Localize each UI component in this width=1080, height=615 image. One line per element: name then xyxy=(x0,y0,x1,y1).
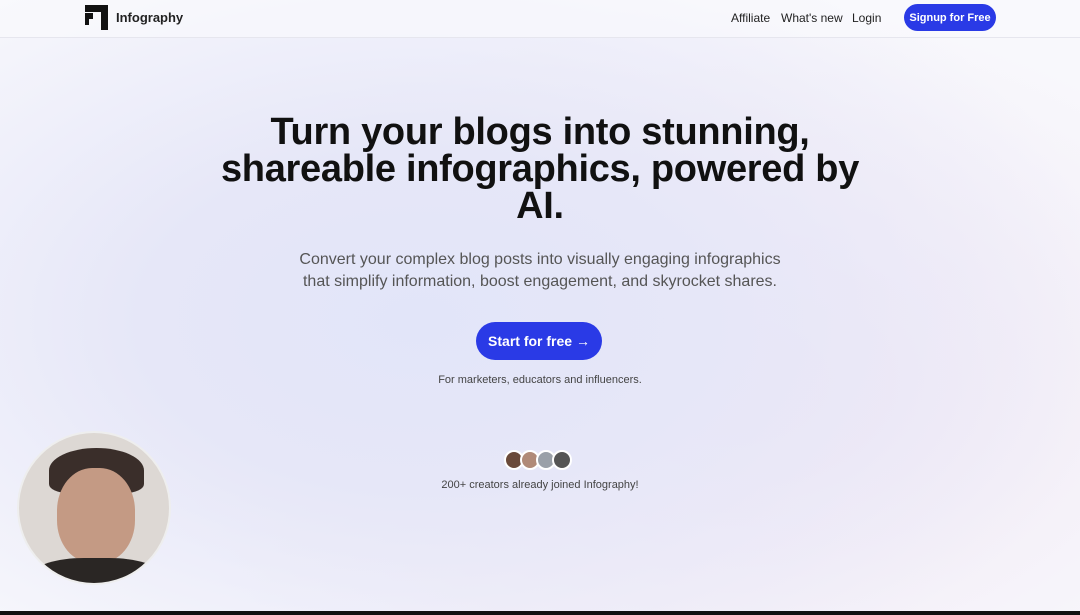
subtitle: Convert your complex blog posts into visually engaging infographics xyxy=(299,251,781,268)
social proof: 200+ creators already joined Infography! xyxy=(441,479,639,491)
logo icon xyxy=(85,5,108,30)
audience note: For marketers, educators and influencers. xyxy=(438,374,642,386)
CTA button xyxy=(476,322,602,360)
bottom bar xyxy=(0,611,1080,615)
navbar xyxy=(0,0,1080,38)
navbar: What's new xyxy=(781,11,843,25)
video bubble xyxy=(17,431,171,585)
brand: Infography xyxy=(116,10,183,25)
signup button: Signup for Free xyxy=(909,12,991,24)
subtitle: that simplify information, boost engagement, and skyrocket shares. xyxy=(303,273,777,290)
navbar: Login xyxy=(852,11,881,25)
headline xyxy=(221,111,860,227)
subtitle xyxy=(299,251,781,290)
headline: AI. xyxy=(516,185,564,227)
nav links: Affiliate xyxy=(731,11,770,25)
CTA button: Start for free → xyxy=(488,333,590,349)
headline: shareable infographics, powered by xyxy=(221,148,859,190)
signup button xyxy=(904,4,996,31)
avatars xyxy=(504,450,572,470)
headline: Turn your blogs into stunning, xyxy=(270,111,810,153)
